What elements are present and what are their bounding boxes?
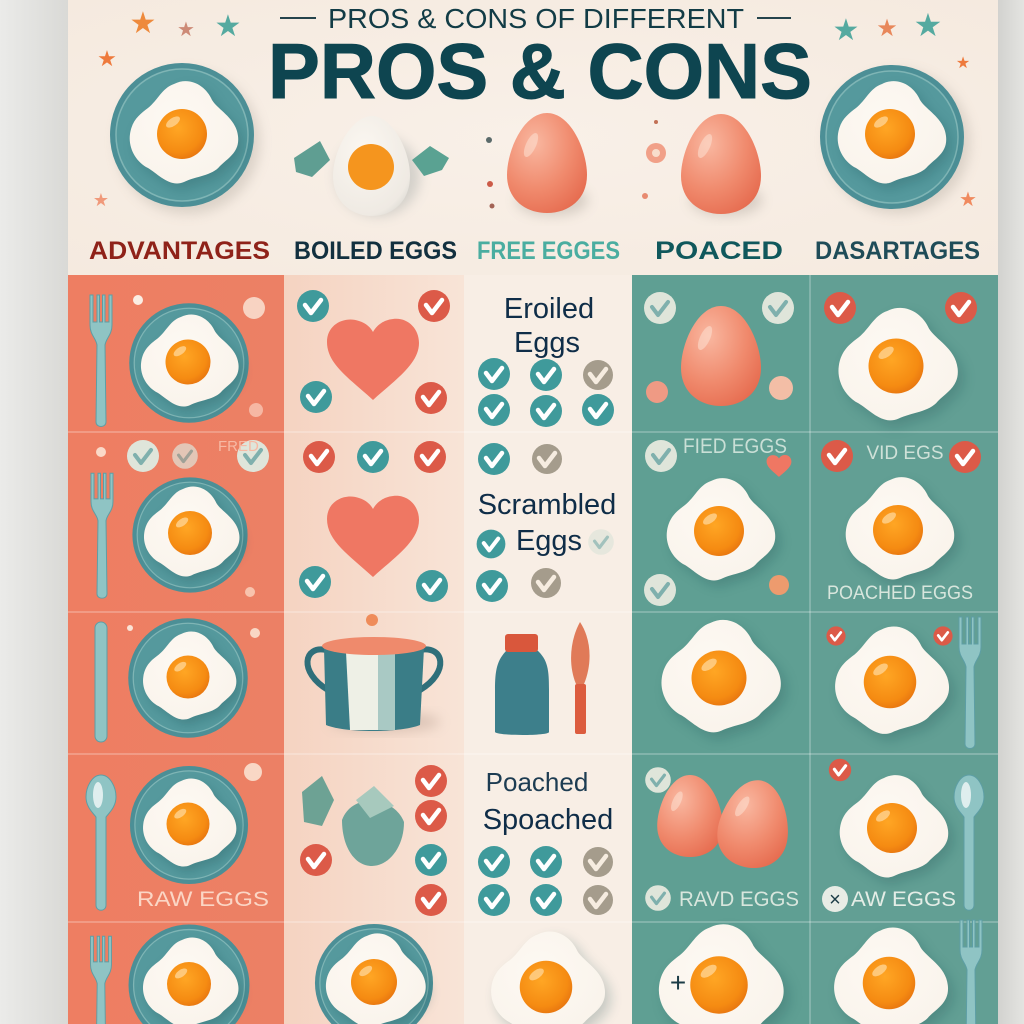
decorative stars right: ★ bbox=[876, 15, 898, 42]
decorative stars right: ★ bbox=[956, 55, 970, 72]
decorative stars right: ★ bbox=[914, 7, 942, 43]
wall background left bbox=[0, 0, 68, 1024]
row 4 labels and checks: Poached bbox=[486, 767, 588, 797]
row 4 egg, spoon and label: AW EGGS bbox=[851, 888, 956, 911]
row 4 bag, leaf and checks bbox=[300, 765, 447, 916]
small accents bbox=[486, 120, 666, 208]
row 2 label and egg bbox=[644, 435, 791, 606]
decorative stars left: ★ bbox=[93, 190, 109, 210]
main title: PROS & CONS bbox=[268, 27, 812, 115]
row 5 egg with plus bbox=[659, 924, 789, 1024]
row 2 label and egg: VID EGS bbox=[866, 443, 944, 464]
row 5 fork and plate bbox=[91, 925, 249, 1024]
decorative stars right bbox=[833, 7, 977, 211]
row 4 labels and checks bbox=[478, 767, 613, 916]
panel: disadvantages column bbox=[821, 292, 984, 1024]
decorative stars left: ★ bbox=[130, 7, 156, 40]
decorative stars left: ★ bbox=[215, 10, 241, 43]
column headings: ADVANTAGES bbox=[89, 237, 270, 265]
decorative stars right: ★ bbox=[959, 189, 977, 211]
panel: boiled eggs column bbox=[297, 290, 450, 1024]
row 2 fork and plate bbox=[91, 438, 269, 598]
row 4 eggs and label bbox=[645, 767, 799, 911]
row 4 spoon, plate and label: RAW EGGS bbox=[137, 888, 269, 911]
panel: poached column bbox=[644, 292, 799, 1024]
row 1 label and checks: Eggs bbox=[514, 327, 580, 359]
row 2 label and checks: Scrambled bbox=[478, 489, 616, 521]
row 2 label and checks bbox=[476, 443, 616, 602]
decorative stars right: ★ bbox=[833, 14, 859, 47]
panel: column backgrounds bbox=[68, 275, 998, 1024]
wall background right bbox=[998, 0, 1024, 1024]
column headings: POACED bbox=[655, 237, 783, 265]
plate with fried egg, left bbox=[110, 63, 260, 214]
row 1 fork and plate bbox=[90, 295, 265, 426]
row 2 label and checks: Eggs bbox=[516, 525, 582, 557]
column headings bbox=[89, 237, 980, 265]
decorative stars left: ★ bbox=[177, 19, 195, 41]
column headings: BOILED EGGS bbox=[294, 237, 457, 265]
coral egg bbox=[507, 113, 588, 216]
boiled egg with leaves bbox=[294, 116, 449, 216]
row 2 label and egg: POACHED EGGS bbox=[827, 583, 973, 604]
row 3 egg bbox=[661, 620, 786, 739]
row 5 fried egg bbox=[491, 932, 610, 1024]
row 3 egg and fork bbox=[826, 617, 981, 748]
row 5 plate bbox=[315, 924, 433, 1024]
row 5 egg and fork bbox=[834, 920, 982, 1024]
row 4 spoon, plate and label bbox=[86, 763, 269, 911]
row 1 egg bbox=[644, 292, 794, 406]
column headings: FREE EGGES bbox=[477, 237, 620, 265]
row 4 labels and checks: Spoached bbox=[483, 804, 613, 836]
row 2 heart with checks bbox=[299, 441, 448, 602]
row 2 fork and plate: FRED bbox=[218, 438, 259, 455]
plate with fried egg, right bbox=[820, 65, 970, 214]
row 4 egg, spoon and label: × bbox=[829, 889, 841, 911]
row 4 eggs and label: RAVD EGGS bbox=[679, 888, 799, 911]
row 1 label and checks: Eroiled bbox=[504, 293, 594, 325]
row 4 egg, spoon and label bbox=[822, 759, 984, 912]
row 2 label and egg: FIED EGGS bbox=[683, 435, 787, 458]
panel: middle column bbox=[476, 293, 616, 1024]
row 1 label and checks bbox=[478, 293, 614, 427]
row 5 egg with plus: + bbox=[670, 967, 686, 998]
row 3 pot bbox=[307, 614, 440, 732]
decorative stars left bbox=[93, 7, 241, 210]
decorative stars left: ★ bbox=[97, 46, 117, 71]
panel: poster header bbox=[68, 0, 998, 275]
row 3 knife and plate bbox=[95, 618, 260, 742]
panel: advantages column bbox=[86, 295, 269, 1024]
row 3 bottle and spatula bbox=[495, 622, 590, 735]
row 1 heart with checks bbox=[297, 290, 450, 414]
second coral egg bbox=[681, 114, 762, 216]
title line above: PROS & CONS OF DIFFERENT bbox=[328, 3, 744, 34]
column headings: DASARTAGES bbox=[815, 237, 980, 265]
row 2 label and egg bbox=[821, 440, 981, 604]
row 1 egg bbox=[824, 292, 977, 427]
